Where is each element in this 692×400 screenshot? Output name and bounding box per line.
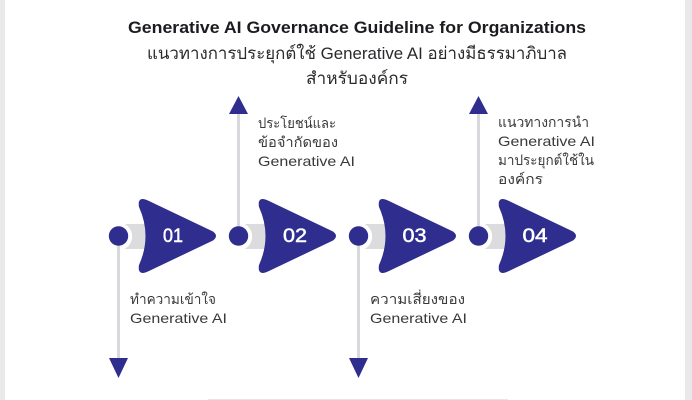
connector line 04 up xyxy=(477,110,480,236)
step 03: 03 xyxy=(402,226,426,247)
step 01 xyxy=(109,199,216,273)
arrow head 02 xyxy=(229,96,248,114)
step 01: 01 xyxy=(163,226,183,247)
thai heading: แนวทางการประยุกต์ใช้ Generative AI อย่างมีธรรมาภิบาล xyxy=(147,43,567,64)
step 03 xyxy=(349,199,456,273)
title xyxy=(128,18,586,88)
label 03 xyxy=(370,290,467,326)
label 01: ทำความเข้าใจ xyxy=(130,291,216,307)
label 03: Generative AI xyxy=(370,310,467,326)
arrow head 01 xyxy=(109,358,128,378)
label 04: มาประยุกต์ใช้ใน xyxy=(498,152,594,169)
label 04: แนวทางการนำ xyxy=(498,114,589,130)
label 04: Generative AI xyxy=(498,133,595,149)
label 01: Generative AI xyxy=(130,310,227,326)
thai heading second line: สำหรับองค์กร xyxy=(306,69,408,88)
label 02: ข้อจำกัดของ xyxy=(258,134,338,150)
arrow head 04 xyxy=(469,96,488,114)
step 04 xyxy=(469,199,576,273)
label 03: ความเสี่ยงของ xyxy=(370,290,465,307)
label 02 xyxy=(258,115,355,169)
connector line 02 up xyxy=(237,110,240,236)
step 04: 04 xyxy=(522,226,548,247)
label 04: องค์กร xyxy=(498,171,544,187)
label 01 xyxy=(130,291,227,326)
step 02 xyxy=(229,199,336,273)
english heading: Generative AI Governance Guideline for Organizations xyxy=(128,18,586,37)
arrow head 03 xyxy=(349,358,368,378)
label 02: Generative AI xyxy=(258,153,355,169)
connector line 01 down xyxy=(117,236,120,362)
label 02: ประโยชน์และ xyxy=(258,115,336,131)
label 04 xyxy=(498,114,595,187)
step 02: 02 xyxy=(283,226,307,247)
connector line 03 down xyxy=(357,236,360,362)
